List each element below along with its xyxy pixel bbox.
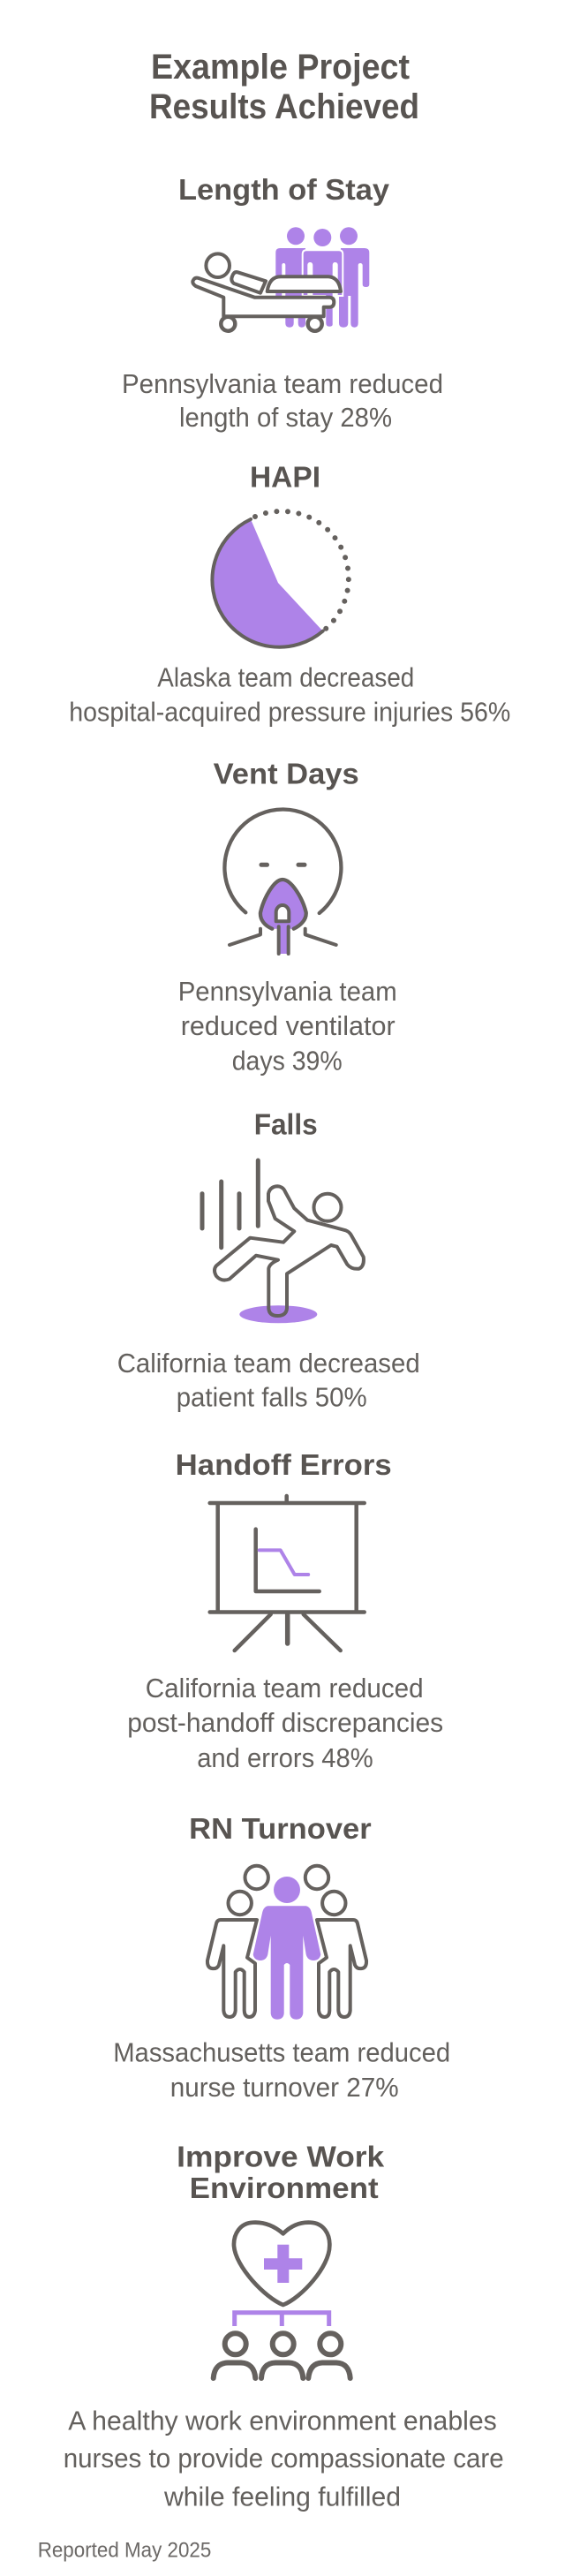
body text: RN turnover: Massachusetts team reduced	[113, 2036, 450, 2068]
body text: RN turnover	[113, 2036, 450, 2103]
heading: falls: Falls	[254, 1107, 318, 1141]
heading: handoff errors: Handoff Errors	[176, 1448, 392, 1481]
body text: length of stay: length of stay 28%	[179, 402, 392, 433]
body text: improve work environment: A healthy work environment enables	[68, 2406, 497, 2436]
body text: vent days: reduced ventilator	[181, 1010, 396, 1041]
body text: HAPI: hospital-acquired pressure injuries 56%	[69, 697, 510, 728]
body text: RN turnover: nurse turnover 27%	[170, 2072, 399, 2103]
title	[149, 48, 419, 126]
body text: falls	[117, 1348, 420, 1413]
body text: falls: California team decreased	[117, 1348, 420, 1379]
body text: handoff errors: California team reduced	[146, 1673, 424, 1703]
panel: falls	[117, 1107, 420, 1413]
icon: heart with cross above team	[214, 2223, 350, 2378]
body text: HAPI	[69, 662, 510, 728]
footer: report date: Reported May 2025	[38, 2539, 211, 2563]
body text: improve work environment: nurses to provide compassionate care	[64, 2443, 504, 2474]
heading: vent days: Vent Days	[214, 757, 359, 789]
icon: falling person	[202, 1160, 364, 1323]
title: Example Project	[151, 48, 410, 87]
icon: pie chart 56 percent	[212, 511, 349, 647]
body text: vent days: days 39%	[232, 1046, 343, 1076]
icon: patient with ventilator mask	[224, 809, 341, 954]
panel: improve work environment	[64, 2140, 504, 2512]
panel: HAPI	[69, 461, 510, 728]
heading: HAPI: HAPI	[250, 461, 320, 494]
icon: patient on bed with care team	[192, 227, 369, 331]
body text: vent days	[178, 976, 397, 1076]
body text: length of stay	[122, 368, 443, 433]
icon: presentation board with declining chart	[210, 1496, 365, 1651]
panel: vent days	[178, 757, 397, 1076]
body text: HAPI: Alaska team decreased	[157, 662, 414, 692]
heading: improve work environment	[177, 2140, 385, 2204]
heading: length of stay: Length of Stay	[178, 173, 390, 206]
panel: length of stay	[122, 173, 443, 433]
body text: improve work environment: while feeling fulfilled	[163, 2482, 401, 2512]
panel: RN turnover	[113, 1812, 450, 2103]
body text: handoff errors: post-handoff discrepancies	[127, 1707, 443, 1738]
panel: handoff errors	[127, 1448, 443, 1773]
body text: falls: patient falls 50%	[177, 1382, 367, 1413]
body text: handoff errors	[127, 1673, 443, 1773]
body text: length of stay: Pennsylvania team reduced	[122, 368, 443, 399]
body text: vent days: Pennsylvania team	[178, 976, 397, 1007]
heading: improve work environment: Improve Work	[177, 2140, 385, 2172]
heading: improve work environment: Environment	[190, 2172, 379, 2204]
body text: improve work environment	[64, 2406, 504, 2512]
title: Results Achieved	[149, 87, 419, 126]
icon: team surrounding central nurse	[207, 1866, 366, 2020]
body text: handoff errors: and errors 48%	[197, 1742, 373, 1773]
heading: RN turnover: RN Turnover	[189, 1812, 372, 1845]
